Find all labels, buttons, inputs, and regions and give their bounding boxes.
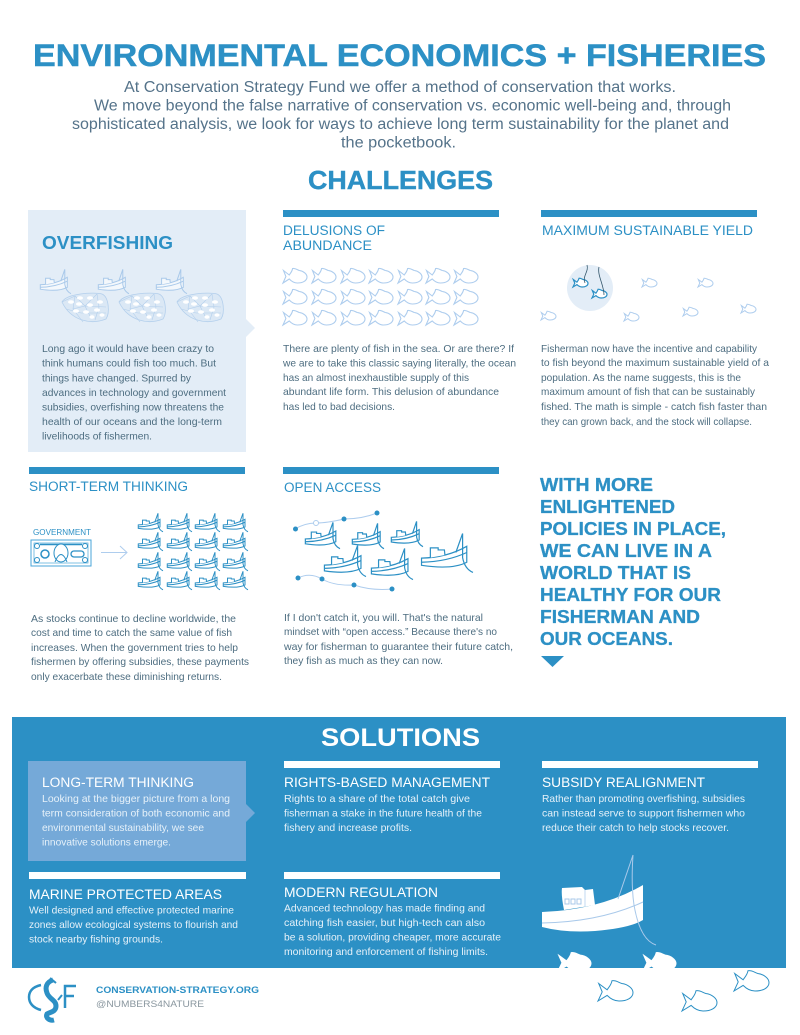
logo: conservation strategy fund <box>29 978 76 1020</box>
text: long-term body: environmental sustainability, we see <box>42 822 204 834</box>
text: delusions body <box>282 343 516 413</box>
icon: grid of fish <box>283 268 478 325</box>
text: overfishing body: livelihoods of fishermen. <box>42 430 152 442</box>
panel: overfishing <box>28 210 255 452</box>
text: subsidy body: Rather than promoting overfishing, subsidies <box>542 793 745 805</box>
text: delusions body: abundant life form. This delusion of abundance <box>283 386 499 398</box>
text: social handle: @NUMBERS4NATURE <box>96 999 204 1010</box>
title: ENVIRONMENTAL ECONOMICS + FISHERIES <box>33 37 766 73</box>
callout: more enlightened policies: WORLD THAT IS <box>540 562 691 583</box>
heading: rights-based management: RIGHTS-BASED MANAGEMENT <box>284 775 490 790</box>
heading: modern regulation: MODERN REGULATION <box>284 885 438 900</box>
text: yield body: to fish beyond the maximum sustainable yield of a <box>541 357 769 369</box>
callout: more enlightened policies: POLICIES IN PLACE, <box>540 518 726 539</box>
text: rights body <box>284 793 482 834</box>
text: yield body <box>541 343 769 428</box>
icon: boats with nets <box>40 269 223 322</box>
text: yield body: population. As the name suggests, this is the <box>541 372 741 384</box>
panel: rights-based management <box>284 761 500 834</box>
heading: solutions: SOLUTIONS <box>321 724 480 752</box>
text: open access body: If I don't catch it, you will. That's the natural <box>284 612 483 624</box>
text: subsidy body <box>542 793 745 834</box>
text: rights body: fishery and increase profits. <box>284 822 412 834</box>
text: short-term body: cost and time to catch the same value of fish <box>31 627 232 639</box>
text: marine body <box>29 904 238 946</box>
text: rights body: Rights to a share of the total catch give <box>284 793 470 805</box>
text: regulation body: catching fish easier, but high-tech can also <box>284 917 485 929</box>
text: yield body: maximum amount of fish that can be sustainably <box>541 386 756 398</box>
icon: boats and buoy lines <box>293 510 473 592</box>
text: long-term body: Looking at the bigger picture from a long <box>42 793 230 805</box>
icon: grid of boats <box>138 513 248 590</box>
heading: overfishing: OVERFISHING <box>42 233 173 253</box>
icon: government dollar bill <box>31 527 91 566</box>
callout: more enlightened policies: FISHERMAN AND <box>540 606 700 627</box>
text: short-term body <box>31 613 249 683</box>
heading: marine protected areas: MARINE PROTECTED AREAS <box>29 887 222 902</box>
intro text: We move beyond the false narrative of conservation vs. economic well-being and, through <box>94 98 731 114</box>
text: marine body: zones allow ecological systems to flourish and <box>29 919 238 931</box>
icon: outlined fish <box>598 971 769 1011</box>
text: overfishing body: subsidies, overfishing now threatens the <box>42 402 224 414</box>
heading: short-term thinking: SHORT-TERM THINKING <box>29 479 188 494</box>
text: overfishing body: things have changed. Spurred by <box>42 372 192 384</box>
heading: delusions of abundance <box>283 223 385 253</box>
callout: more enlightened policies: WITH MORE <box>540 474 653 495</box>
text: overfishing body: advances in technology and government <box>42 387 226 399</box>
text: subsidy body: can instead serve to support fishermen who <box>542 808 745 820</box>
panel: delusions of abundance <box>282 210 516 413</box>
text: regulation body: monitoring and enforcement of fishing limits. <box>284 946 488 958</box>
text: rights body: fisherman a stake in the future health of the <box>284 808 482 820</box>
text: regulation body <box>284 902 501 958</box>
text: open access body: mindset with “open access.” Because there's no <box>284 626 497 638</box>
text: open access body <box>283 612 513 667</box>
text: yield body: they can grown back, and the stock will collapse. <box>541 416 752 428</box>
icon: large white fishing boat <box>542 855 656 945</box>
text: website: CONSERVATION-STRATEGY.ORG <box>96 985 259 996</box>
text: long-term body: term consideration of both economic and <box>42 808 230 820</box>
panel: subsidy realignment <box>542 761 758 834</box>
text: short-term body: only exacerbate these diminishing returns. <box>31 671 222 683</box>
heading: open access: OPEN ACCESS <box>284 480 381 495</box>
text: delusions body: has an almost inexhaustible supply of this <box>283 372 469 384</box>
arrow: subsidy to boats <box>101 546 127 559</box>
text: overfishing body: Long ago it would have been crazy to <box>42 343 214 355</box>
heading: delusions of abundance: ABUNDANCE <box>283 238 372 253</box>
panel: solutions background <box>12 717 786 968</box>
text: overfishing body <box>42 343 226 442</box>
text: marine body: stock nearby fishing grounds. <box>29 934 163 946</box>
icon: hooked fish in circle <box>541 265 756 321</box>
icon: down triangle <box>541 656 564 667</box>
intro text: At Conservation Strategy Fund we offer a method of conservation that works. <box>124 79 676 96</box>
text: delusions body: There are plenty of fish in the sea. Or are there? If <box>283 343 514 355</box>
text: yield body: fished. The math is simple - catch fish faster than <box>541 401 767 413</box>
text: delusions body: has led to bad decisions. <box>283 401 395 413</box>
callout: more enlightened policies: HEALTHY FOR OUR <box>540 584 721 605</box>
icon: government dollar bill: GOVERNMENT <box>33 527 91 537</box>
callout: more enlightened policies: WE CAN LIVE IN A <box>540 540 712 561</box>
intro text: the pocketbook. <box>341 134 456 152</box>
intro text <box>72 79 731 152</box>
text: regulation body: be a solution, providing cheaper, more accurate <box>284 932 501 944</box>
text: short-term body: fishermen by offering subsidies, these payments <box>31 656 249 668</box>
panel: short-term thinking <box>29 467 249 683</box>
text: overfishing body: health of our oceans and the long-term <box>42 416 222 428</box>
panel: modern regulation <box>284 872 501 958</box>
callout: more enlightened policies: OUR OCEANS. <box>540 628 673 649</box>
text: yield body: Fisherman now have the incentive and capability <box>541 343 758 355</box>
heading: maximum sustainable yield: MAXIMUM SUSTAINABLE YIELD <box>542 223 753 238</box>
icon: white fish <box>558 953 676 971</box>
panel: marine protected areas <box>29 872 246 946</box>
text: marine body: Well designed and effective protected marine <box>29 904 234 916</box>
text: short-term body: As stocks continue to decline worldwide, the <box>31 613 236 625</box>
text: short-term body: increases. When the government tries to help <box>31 642 238 654</box>
text: subsidy body: reduce their catch to help stocks recover. <box>542 822 729 834</box>
callout: more enlightened policies: ENLIGHTENED <box>540 496 675 517</box>
panel: maximum sustainable yield <box>541 210 769 428</box>
text: overfishing body: think humans could fish too much. But <box>42 358 216 370</box>
heading: delusions of abundance: DELUSIONS OF <box>283 223 385 238</box>
text: long-term body: innovative solutions emerge. <box>42 836 171 848</box>
text: long-term body <box>42 793 230 848</box>
heading: subsidy realignment: SUBSIDY REALIGNMENT <box>542 775 705 790</box>
heading: challenges: CHALLENGES <box>308 167 493 195</box>
panel: open access <box>283 467 513 667</box>
text: delusions body: we are to take this classic saying literally, the ocean <box>282 358 516 370</box>
panel: long-term thinking <box>28 761 255 861</box>
callout: more enlightened policies <box>540 474 726 667</box>
text: open access body: way for fisherman to guarantee their future catch, <box>283 641 513 653</box>
heading: long-term thinking: LONG-TERM THINKING <box>42 775 194 790</box>
text: open access body: they fish as much as they can now. <box>284 655 443 667</box>
intro text: sophisticated analysis, we look for ways to achieve long term sustainability for the planet and <box>72 116 729 133</box>
text: regulation body: Advanced technology has made finding and <box>284 902 485 914</box>
